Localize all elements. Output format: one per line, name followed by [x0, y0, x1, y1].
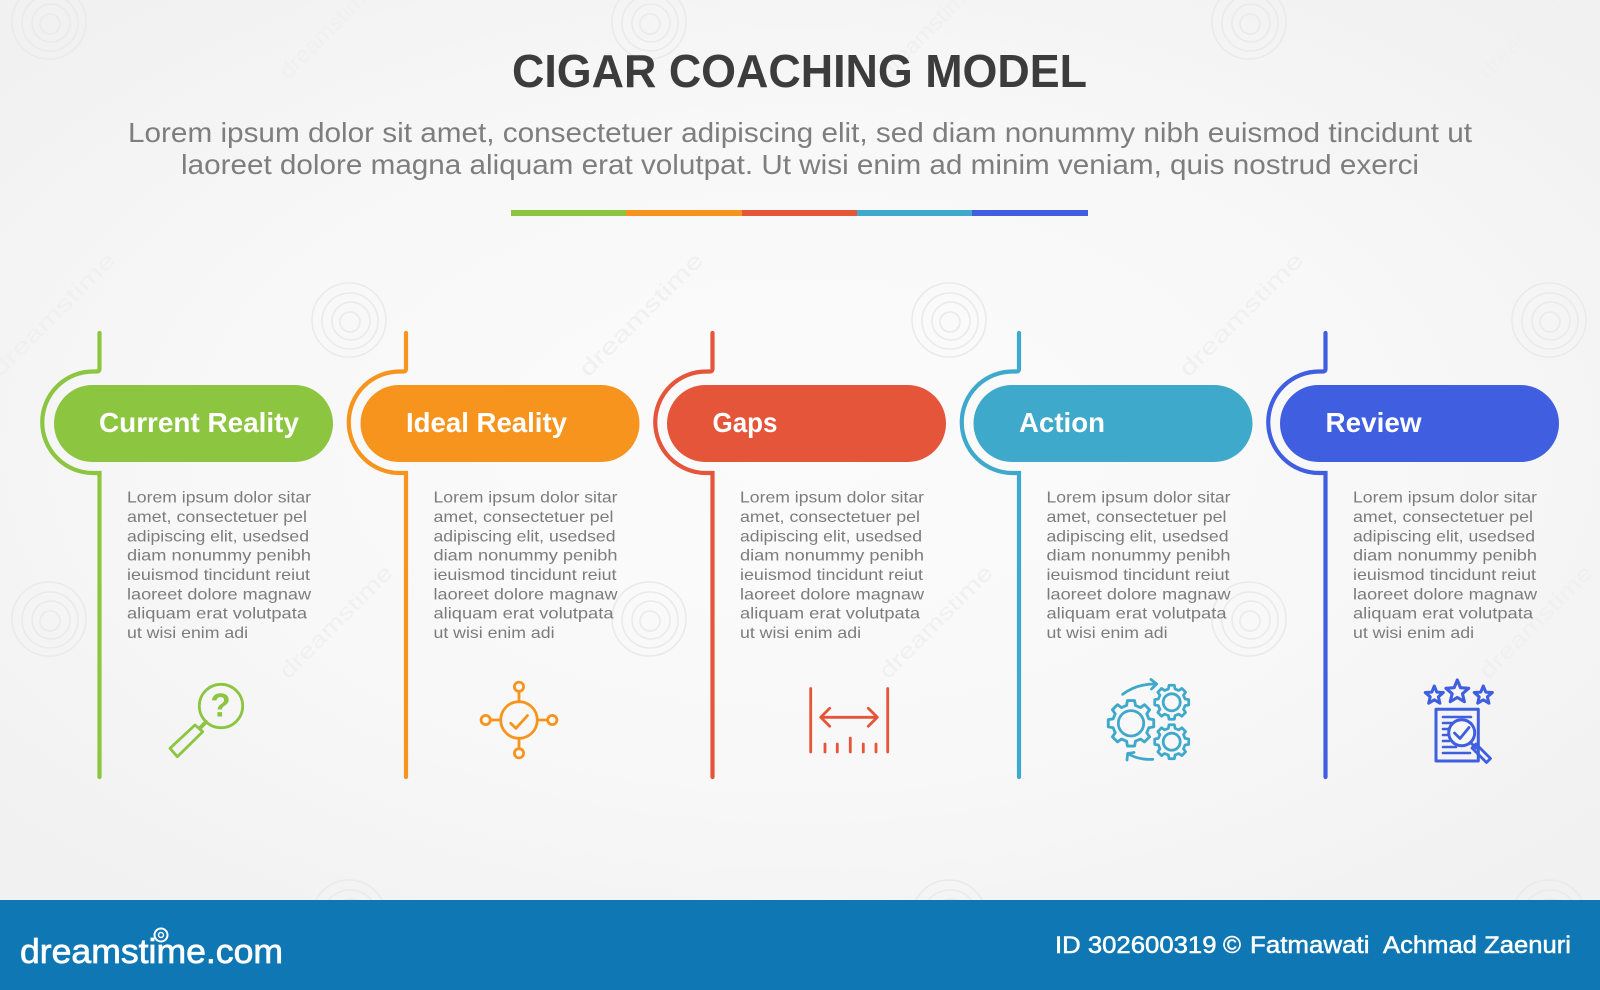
body text: ieuismod tincidunt reiut — [1046, 567, 1230, 584]
body text: ieuismod tincidunt reiut — [434, 567, 617, 584]
footer credit: ID 302600319 — [1055, 932, 1216, 959]
panel: ideal reality — [349, 333, 640, 777]
icon: target node with check — [481, 682, 557, 758]
body text: adipiscing elit, usedsed — [740, 528, 922, 545]
body text: amet, consectetuer pel — [1046, 509, 1226, 526]
connector line — [349, 333, 406, 777]
body text — [1353, 490, 1538, 642]
icon: magnifier with question mark — [170, 684, 243, 757]
body text: ut wisi enim adi — [1046, 625, 1168, 642]
watermark pattern: dreamstime — [1174, 247, 1308, 382]
body text: aliquam erat volutpata — [740, 606, 920, 623]
body text — [434, 490, 618, 642]
panel: gaps — [655, 333, 946, 777]
body text: amet, consectetuer pel — [740, 509, 920, 526]
pill heading: Action — [1019, 407, 1105, 438]
footer bar — [0, 900, 1600, 990]
body text: adipiscing elit, usedsed — [434, 528, 616, 545]
body text: aliquam erat volutpata — [434, 606, 614, 623]
subtitle: Lorem ipsum dolor sit amet, consectetuer adipiscing elit, sed diam nonummy nibh euismod tincidunt ut — [128, 117, 1472, 148]
body text: laoreet dolore magnaw — [127, 586, 312, 603]
watermark pattern: dreamstime — [574, 247, 708, 382]
body text: ieuismod tincidunt reiut — [1353, 567, 1537, 584]
subtitle: laoreet dolore magna aliquam erat volutpat. Ut wisi enim ad minim veniam, quis nostrud exerci — [181, 149, 1419, 180]
body text: diam nonummy penibh — [740, 548, 924, 565]
pill heading: Gaps — [712, 407, 778, 438]
pill heading: Review — [1326, 407, 1422, 438]
body text — [1046, 490, 1231, 642]
subtitle — [128, 117, 1472, 180]
body text: ut wisi enim adi — [740, 625, 861, 642]
body text: laoreet dolore magnaw — [740, 586, 925, 603]
footer credit: Achmad Zaenuri — [1383, 932, 1571, 959]
body text: Lorem ipsum dolor sitar — [127, 490, 312, 507]
body text: adipiscing elit, usedsed — [1353, 528, 1535, 545]
body text: aliquam erat volutpata — [1353, 606, 1533, 623]
body text: diam nonummy penibh — [1046, 548, 1230, 565]
body text: adipiscing elit, usedsed — [127, 528, 309, 545]
body text: ut wisi enim adi — [127, 625, 248, 642]
body text: Lorem ipsum dolor sitar — [740, 490, 925, 507]
body text — [740, 490, 925, 642]
body text: Lorem ipsum dolor sitar — [1046, 490, 1231, 507]
body text: ieuismod tincidunt reiut — [127, 567, 311, 584]
body text: diam nonummy penibh — [1353, 548, 1537, 565]
pill heading: Current Reality — [99, 407, 300, 438]
pill heading — [1280, 385, 1559, 462]
body text: amet, consectetuer pel — [434, 509, 614, 526]
body text: ieuismod tincidunt reiut — [740, 567, 924, 584]
pill heading — [360, 385, 640, 462]
body text: diam nonummy penibh — [127, 548, 311, 565]
body text: aliquam erat volutpata — [1046, 606, 1227, 623]
watermark pattern: dreamstime — [1474, 560, 1598, 684]
body text — [127, 490, 312, 642]
body text: amet, consectetuer pel — [1353, 509, 1533, 526]
footer credit: © — [1223, 932, 1241, 959]
icon: gap ruler — [811, 688, 888, 752]
connector line — [655, 333, 712, 777]
body text: aliquam erat volutpata — [127, 606, 307, 623]
icon: stars and reviewed document — [1425, 680, 1492, 762]
body text: ut wisi enim adi — [434, 625, 554, 642]
panel: current reality — [42, 333, 333, 777]
watermark pattern: dreamstime — [874, 560, 998, 684]
watermark pattern: dreamstime — [274, 560, 398, 684]
pill heading — [54, 385, 333, 462]
connector line — [962, 333, 1019, 777]
body text: diam nonummy penibh — [434, 548, 618, 565]
footer logo: dreamstime.com — [20, 933, 283, 971]
title: CIGAR COACHING MODEL — [512, 45, 1087, 97]
pill heading: Ideal Reality — [406, 407, 568, 438]
body text: adipiscing elit, usedsed — [1046, 528, 1228, 545]
body text: laoreet dolore magnaw — [1046, 586, 1231, 603]
footer credit: Fatmawati — [1250, 932, 1370, 959]
panel: review — [1268, 333, 1559, 777]
connector line — [1268, 333, 1326, 777]
body text: laoreet dolore magnaw — [434, 586, 618, 603]
pill heading — [974, 385, 1252, 462]
icon: magnifier with question mark: ? — [210, 686, 231, 724]
body text: Lorem ipsum dolor sitar — [1353, 490, 1538, 507]
icon: gears with arrows — [1108, 680, 1189, 760]
body text: ut wisi enim adi — [1353, 625, 1474, 642]
body text: laoreet dolore magnaw — [1353, 586, 1538, 603]
body text: Lorem ipsum dolor sitar — [434, 490, 618, 507]
panel: action — [962, 333, 1252, 777]
footer credit — [1055, 932, 1571, 959]
pill heading — [667, 385, 946, 462]
body text: amet, consectetuer pel — [127, 509, 307, 526]
colored divider bar — [511, 210, 1088, 216]
connector line — [42, 333, 100, 777]
